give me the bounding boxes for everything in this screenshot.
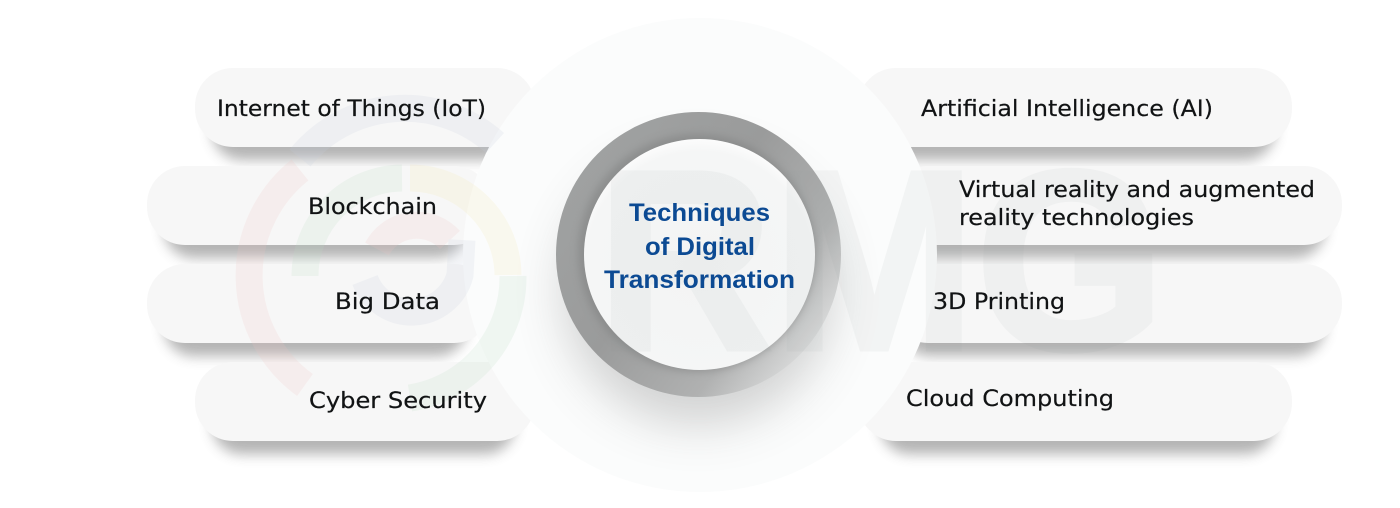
title: Transformation [604, 266, 795, 294]
pill: Blockchain [147, 166, 492, 258]
pill: Big Data [147, 264, 492, 356]
label: Internet of Things: Internet of Things (IoT) [217, 97, 486, 122]
label: Virtual and augmented reality [959, 178, 1315, 231]
pill: 3D Printing [890, 264, 1342, 356]
panel: right pills [858, 68, 1342, 454]
panel: left pills [147, 68, 535, 454]
label: Virtual and augmented reality: reality technologies [959, 206, 1194, 231]
pill: Virtual and augmented reality [890, 166, 1342, 258]
watermark letters RMG: RMG [597, 118, 1165, 404]
title [604, 199, 795, 294]
label: Cyber Security: Cyber Security [309, 389, 487, 414]
label: 3D Printing: 3D Printing [933, 290, 1065, 315]
pill: Internet of Things [195, 68, 535, 160]
pill: Cloud Computing [858, 362, 1292, 454]
pill: Artificial Intelligence [858, 68, 1292, 160]
label: Cloud Computing: Cloud Computing [906, 387, 1114, 412]
watermark logo [249, 108, 513, 398]
large backdrop circle [463, 18, 937, 492]
label: Big Data: Big Data [335, 290, 440, 315]
center badge [556, 112, 841, 425]
label: Virtual and augmented reality: Virtual reality and augmented [959, 178, 1315, 203]
title: of Digital [645, 233, 755, 261]
left pill labels [217, 97, 487, 414]
label: Blockchain: Blockchain [308, 195, 437, 220]
right pill labels [906, 97, 1315, 412]
title: Techniques [629, 199, 770, 227]
label: Artificial Intelligence: Artificial Intelligence (AI) [921, 97, 1213, 122]
pill: Cyber Security [195, 362, 535, 454]
